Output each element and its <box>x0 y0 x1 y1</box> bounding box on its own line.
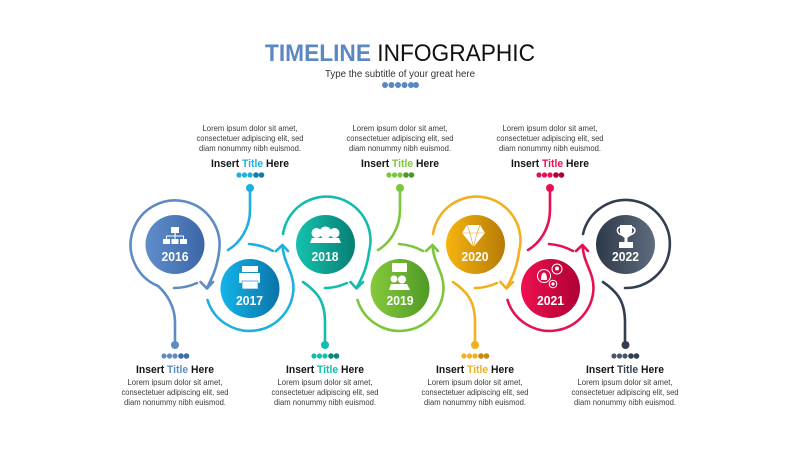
short arc <box>249 244 273 251</box>
icon: speaker with bubble <box>389 263 410 290</box>
ring <box>433 197 521 288</box>
dots <box>461 353 489 359</box>
heading: Insert Title Here <box>286 364 364 376</box>
year circle <box>370 259 430 318</box>
arrow head <box>200 282 213 288</box>
lead line <box>528 188 550 250</box>
body text <box>196 124 304 153</box>
dots <box>236 172 264 178</box>
body text: Lorem ipsum dolor sit amet, <box>278 378 372 387</box>
short arc <box>549 244 573 251</box>
body text: diam nonummy nibh euismod. <box>124 398 226 407</box>
body text: diam nonummy nibh euismod. <box>199 144 301 153</box>
ring <box>508 246 594 331</box>
body text: consectetuer adipiscing elit, sed <box>272 388 378 397</box>
body text: diam nonummy nibh euismod. <box>349 144 451 153</box>
panel: 2018 <box>272 197 378 407</box>
body text: diam nonummy nibh euismod. <box>424 398 526 407</box>
year: 2022 <box>612 250 639 264</box>
title: TIMELINE INFOGRAPHIC <box>265 40 535 67</box>
short arc <box>174 283 197 288</box>
year circle <box>596 215 655 274</box>
body text: diam nonummy nibh euismod. <box>274 398 376 407</box>
lead end dot <box>546 184 554 192</box>
heading: Insert Title Here <box>436 364 514 376</box>
year circle <box>521 259 580 318</box>
heading: Insert Title Here <box>511 158 589 170</box>
short arc <box>399 244 423 251</box>
dots <box>161 353 189 359</box>
panel: 2016 <box>122 200 228 407</box>
ring <box>283 197 371 288</box>
icon: printer <box>239 266 260 289</box>
ring <box>208 246 294 331</box>
lead end dot <box>171 341 179 349</box>
year: 2017 <box>236 294 263 308</box>
lead end dot <box>471 341 479 349</box>
body text: consectetuer adipiscing elit, sed <box>346 134 454 143</box>
body text <box>346 124 454 153</box>
icon: people <box>310 226 341 243</box>
arrow head <box>350 282 363 288</box>
dots <box>311 353 339 359</box>
body text: Lorem ipsum dolor sit amet, <box>428 378 522 387</box>
ring <box>358 246 444 331</box>
body text: consectetuer adipiscing elit, sed <box>496 134 604 143</box>
subtitle: Type the subtitle of your great here <box>325 69 475 80</box>
lead line <box>603 282 625 345</box>
dots <box>611 353 639 359</box>
lead line <box>378 188 400 250</box>
year circle <box>296 215 355 274</box>
ring <box>583 200 670 288</box>
icon: trophy <box>617 225 635 248</box>
body text: Lorem ipsum dolor sit amet, <box>352 124 448 133</box>
title dots <box>382 82 419 88</box>
lead line <box>303 282 325 345</box>
arrow head <box>576 245 588 251</box>
icon: diamond <box>462 225 485 247</box>
body text <box>422 378 528 407</box>
lead end dot <box>622 341 630 349</box>
ring with lead line <box>131 200 220 345</box>
body text: Lorem ipsum dolor sit amet, <box>128 378 222 387</box>
short arc <box>475 283 497 288</box>
body text: consectetuer adipiscing elit, sed <box>122 388 228 397</box>
body text <box>572 378 678 407</box>
heading: Insert Title Here <box>361 158 439 170</box>
body text: Lorem ipsum dolor sit amet, <box>202 124 298 133</box>
year: 2019 <box>386 294 414 308</box>
arrow head <box>500 282 513 288</box>
dots <box>386 172 414 178</box>
panel: 2022 <box>572 200 678 407</box>
body text <box>496 124 604 153</box>
icon: org chart <box>163 227 187 244</box>
lead line <box>228 188 250 250</box>
heading: Insert Title Here <box>586 364 664 376</box>
year circle <box>220 259 280 318</box>
heading: Insert Title Here <box>211 158 289 170</box>
arrow head <box>426 245 438 251</box>
year: 2016 <box>162 250 189 264</box>
body text: consectetuer adipiscing elit, sed <box>196 134 304 143</box>
icon: connected people <box>538 264 562 288</box>
panel: 2021 <box>496 124 604 331</box>
panel: 2019 <box>346 124 454 331</box>
year circle <box>146 215 204 274</box>
body text: consectetuer adipiscing elit, sed <box>422 388 528 397</box>
panel: 2017 <box>196 124 304 331</box>
year: 2018 <box>312 250 339 264</box>
heading: Insert Title Here <box>136 364 214 376</box>
arrow head <box>276 245 288 251</box>
year: 2021 <box>537 294 564 308</box>
short arc <box>325 283 347 288</box>
body text: diam nonummy nibh euismod. <box>574 398 676 407</box>
lead end dot <box>321 341 329 349</box>
body text <box>272 378 378 407</box>
dots <box>536 172 564 178</box>
year: 2020 <box>462 250 489 264</box>
year circle <box>446 215 505 274</box>
lead end dot <box>246 184 254 192</box>
panel: 2020 <box>422 197 528 407</box>
body text: Lorem ipsum dolor sit amet, <box>502 124 598 133</box>
body text: diam nonummy nibh euismod. <box>499 144 601 153</box>
body text <box>122 378 228 407</box>
body text: Lorem ipsum dolor sit amet, <box>578 378 672 387</box>
lead line <box>453 282 475 345</box>
lead end dot <box>396 184 404 192</box>
body text: consectetuer adipiscing elit, sed <box>572 388 678 397</box>
